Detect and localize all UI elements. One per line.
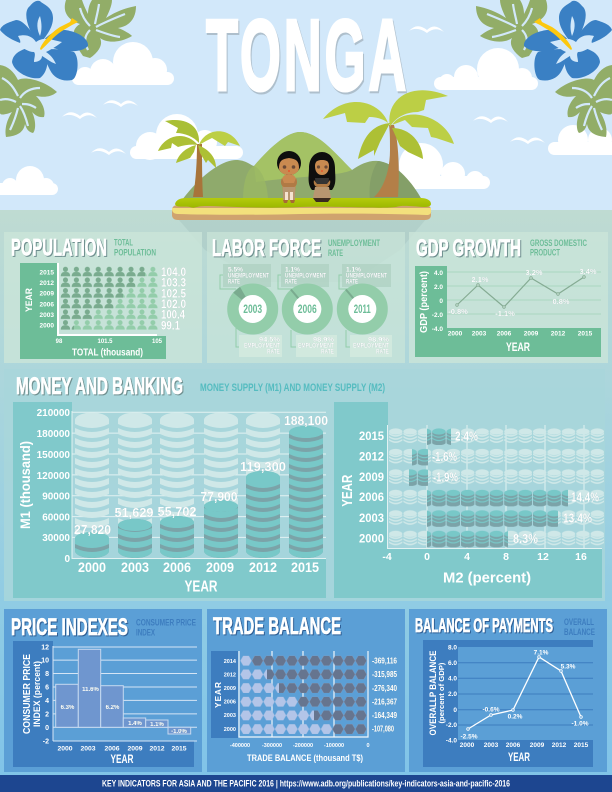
donut labels bbox=[228, 267, 389, 355]
line chart: overall balance: 2012 bbox=[552, 742, 567, 749]
bar chart: CPI: -1.0% bbox=[171, 729, 187, 735]
chart: population pictogram: 105 bbox=[152, 339, 163, 345]
bar chart: CPI: 8 bbox=[45, 671, 49, 678]
donut: 2003: 2003 bbox=[243, 304, 262, 316]
line chart: overall balance: -1.0% bbox=[572, 720, 589, 728]
row 2009 bbox=[388, 467, 604, 487]
donut labels: RATE bbox=[376, 348, 389, 355]
subtitle: unemployment rate: RATE bbox=[328, 248, 343, 259]
line chart: GDP: 2009 bbox=[524, 331, 539, 338]
chart: M2 coin rows: -4 bbox=[382, 551, 392, 563]
chart: M2 coin rows: 13.4% bbox=[563, 510, 592, 526]
stack 2012 bbox=[246, 412, 280, 558]
chart: M2 coin rows: M2 (percent) bbox=[443, 570, 531, 587]
chart: trade hexagons: 2014 bbox=[224, 659, 237, 665]
chart: M2 coin rows: 12 bbox=[537, 551, 549, 563]
chart: M1 coin stacks: 0 bbox=[64, 554, 70, 565]
grass bbox=[175, 198, 431, 208]
chart: M2 coin rows bbox=[334, 402, 604, 598]
bar chart: CPI: 10 bbox=[41, 658, 49, 664]
chart: trade hexagons: -276,340 bbox=[372, 684, 397, 693]
chart: population pictogram: 102.5 bbox=[161, 288, 187, 300]
subtitle: total population: POPULATION bbox=[114, 248, 156, 259]
chart: M1 coin stacks: 2003 bbox=[121, 560, 149, 575]
stack 2015 bbox=[289, 426, 323, 558]
boy character bbox=[277, 151, 301, 203]
subtitle: total population: TOTAL bbox=[114, 238, 133, 249]
line chart: GDP: 2.1% bbox=[471, 275, 489, 284]
chart: M1 coin stacks: 2009 bbox=[206, 560, 234, 575]
label boxes bbox=[220, 264, 392, 357]
line chart: overall balance bbox=[423, 640, 593, 767]
row 2006 bbox=[388, 487, 604, 508]
bar chart: CPI: 2003 bbox=[80, 746, 96, 753]
chart: trade hexagons: -300000 bbox=[262, 743, 282, 749]
right palm bbox=[323, 90, 454, 197]
line chart: overall balance: 4.0 bbox=[448, 676, 457, 682]
bar chart: CPI: 2012 bbox=[149, 746, 165, 753]
bar chart: CPI: 2015 bbox=[171, 746, 187, 753]
bar chart: CPI: 2 bbox=[45, 712, 49, 718]
line chart: overall balance: -0.6% bbox=[483, 706, 500, 714]
chart: M2 coin rows: 8.3% bbox=[513, 531, 538, 546]
donut labels: 1.1% bbox=[346, 267, 361, 274]
chart: trade hexagons: 2000 bbox=[224, 727, 236, 733]
chart: population pictogram: 100.4 bbox=[161, 310, 186, 322]
subtitle: unemployment rate: UNEMPLOYMENT bbox=[328, 238, 380, 249]
chart: population pictogram: 98 bbox=[56, 339, 63, 345]
chart: M1 coin stacks: 55,702 bbox=[158, 504, 196, 519]
chart: M2 coin rows: 2006 bbox=[359, 492, 384, 504]
stack 2006 bbox=[160, 412, 194, 558]
donut: 2011: 2011 bbox=[354, 304, 371, 316]
chart: M1 coin stacks: 2006 bbox=[163, 560, 191, 575]
donut labels: 5.5% bbox=[228, 267, 243, 274]
chart: M2 coin rows: YEAR bbox=[339, 475, 356, 507]
line chart: overall balance: 2000 bbox=[460, 742, 475, 749]
line chart: overall balance: 6.0 bbox=[448, 660, 457, 667]
subtitle: consumer price index: CONSUMER PRICE bbox=[136, 618, 196, 629]
chart: population pictogram: 2015 bbox=[40, 270, 54, 276]
line chart: GDP: -1.1% bbox=[495, 309, 515, 318]
chart: M1 coin stacks: YEAR bbox=[184, 579, 218, 596]
donut labels: UNEMPLOYMENT bbox=[228, 272, 269, 279]
donut labels: EMPLOYMENT bbox=[244, 343, 280, 350]
line chart: overall balance: 2006 bbox=[506, 742, 521, 749]
bar chart: CPI: 1.4% bbox=[128, 721, 142, 727]
chart: trade hexagons: -400000 bbox=[230, 743, 250, 749]
chart: trade hexagons: -100000 bbox=[324, 743, 344, 749]
line chart: GDP: -0.8% bbox=[448, 307, 468, 316]
chart: M1 coin stacks: 30000 bbox=[42, 533, 70, 544]
chart: M1 coin stacks: M1 (thousand) bbox=[17, 441, 33, 529]
sand bbox=[172, 205, 431, 220]
chart: M1 coin stacks: 90000 bbox=[42, 492, 70, 502]
chart: population pictogram: 2000 bbox=[40, 323, 54, 330]
chart: trade hexagons: 0 bbox=[366, 743, 370, 749]
island bbox=[172, 132, 431, 220]
chart: M1 coin stacks: 120000 bbox=[37, 471, 70, 482]
line chart: overall balance: 2009 bbox=[530, 742, 545, 749]
chart: trade hexagons: 2012 bbox=[224, 672, 236, 678]
bar chart: CPI: INDEX (percent) bbox=[32, 661, 42, 727]
chart: M2 coin rows: 8 bbox=[503, 551, 509, 563]
chart: M1 coin stacks: 51,629 bbox=[114, 505, 154, 520]
bar chart: CPI: 1.1% bbox=[150, 722, 164, 728]
background: sea bbox=[0, 210, 612, 792]
panel: trade balance bbox=[207, 609, 405, 772]
line chart: overall balance: 2.0 bbox=[448, 691, 457, 698]
subtitle: gross domestic product: PRODUCT bbox=[530, 248, 560, 259]
footer bar bbox=[0, 775, 612, 792]
panel: GDP growth bbox=[409, 232, 608, 363]
heading: money and banking: MONEY AND BANKING bbox=[16, 373, 183, 400]
line chart: overall balance: OVERALLP BALANCE bbox=[428, 650, 439, 736]
stack 2003 bbox=[118, 412, 152, 558]
chart: trade hexagons: -369,116 bbox=[372, 656, 397, 666]
chart: M1 coin stacks: 77,900 bbox=[200, 489, 238, 504]
hibiscus left bbox=[0, 0, 136, 137]
chart: M2 coin rows: 16 bbox=[575, 551, 587, 563]
line chart: GDP: 2.0 bbox=[434, 284, 443, 291]
chart: population pictogram bbox=[20, 263, 187, 359]
bar chart: CPI: 6.2% bbox=[106, 705, 120, 711]
chart: trade hexagons: 2003 bbox=[224, 713, 236, 719]
line chart: GDP: YEAR bbox=[506, 340, 530, 354]
line chart: overall balance: -2.0 bbox=[446, 722, 457, 729]
line chart: overall balance: YEAR bbox=[508, 750, 530, 764]
line chart: GDP: GDP (percent) bbox=[419, 271, 430, 333]
donut labels: RATE bbox=[346, 278, 358, 285]
chart: trade hexagons: -216,367 bbox=[372, 698, 397, 706]
chart: population pictogram: 101.5 bbox=[97, 339, 113, 345]
line chart: GDP: 4.0 bbox=[434, 270, 443, 277]
bar chart: CPI: CONSUMER PRICE bbox=[22, 654, 33, 734]
line chart: overall balance: -4.0 bbox=[446, 738, 457, 744]
donut: 2006 bbox=[288, 289, 327, 329]
chart: M2 coin rows: 2015 bbox=[359, 431, 385, 443]
island reflection bbox=[172, 212, 432, 282]
hibiscus right bbox=[476, 0, 612, 137]
chart: population pictogram: 2006 bbox=[40, 301, 54, 308]
heading: price indexes: PRICE INDEXES bbox=[11, 614, 128, 641]
line chart: GDP: 2000 bbox=[448, 331, 463, 338]
donut labels: 98.9% bbox=[313, 337, 334, 344]
line chart: GDP: -4.0 bbox=[432, 326, 443, 333]
chart: M1 coin stacks: 119,300 bbox=[240, 459, 286, 474]
chart: M1 coin stacks bbox=[13, 402, 328, 598]
clouds bbox=[0, 42, 612, 195]
line chart: overall balance: 2003 bbox=[484, 742, 499, 749]
bar chart: CPI: -2 bbox=[43, 738, 49, 746]
chart: trade hexagons: 2009 bbox=[224, 686, 236, 692]
girl character bbox=[309, 152, 335, 202]
subtitle: total population bbox=[114, 238, 156, 259]
bar chart: CPI: 4 bbox=[45, 698, 49, 705]
chart: M1 coin stacks: 2000 bbox=[78, 560, 106, 575]
chart: population pictogram: 2009 bbox=[40, 291, 54, 298]
panel: money and banking bbox=[4, 369, 605, 601]
line chart: GDP: 3.2% bbox=[525, 268, 543, 277]
donut labels: EMPLOYMENT bbox=[353, 343, 389, 350]
row 2003 bbox=[388, 508, 604, 528]
heading: trade balance: TRADE BALANCE bbox=[213, 613, 341, 640]
donut labels: UNEMPLOYMENT bbox=[285, 272, 326, 279]
line chart: GDP: 3.4% bbox=[579, 267, 597, 276]
bar chart: CPI: 6.3% bbox=[61, 705, 75, 711]
panel: balance of payments bbox=[409, 609, 607, 772]
line chart: GDP: 2015 bbox=[578, 331, 593, 338]
left palm bbox=[158, 120, 240, 197]
line chart: overall balance: (percent of GDP) bbox=[439, 662, 446, 724]
bar chart: CPI: 0 bbox=[45, 725, 49, 732]
bar chart: CPI: YEAR bbox=[110, 752, 134, 766]
chart: M2 coin rows: 2012 bbox=[359, 452, 384, 464]
chart: M2 coin rows: 14.4% bbox=[571, 490, 599, 504]
chart: M2 coin rows: -1.6% bbox=[432, 449, 457, 464]
panel: price indexes bbox=[4, 609, 202, 772]
line chart: GDP: 0 bbox=[439, 298, 443, 305]
chart: population pictogram: 2003 bbox=[40, 312, 54, 319]
line chart: GDP: 2003 bbox=[472, 331, 487, 338]
chart: trade hexagons: -200000 bbox=[293, 743, 313, 749]
line chart: overall balance: 8.0 bbox=[448, 644, 457, 652]
chart: population pictogram: 103.3 bbox=[161, 278, 186, 290]
donut: 2006: 2006 bbox=[298, 304, 317, 316]
chart: M1 coin stacks: 210000 bbox=[37, 408, 70, 419]
heading: GDP growth: GDP GROWTH bbox=[416, 235, 521, 262]
chart: population pictogram: 99.1 bbox=[161, 320, 181, 332]
subtitle: gross domestic product bbox=[530, 238, 587, 259]
donut labels: 98.9% bbox=[368, 337, 389, 344]
line chart: GDP: 0.8% bbox=[552, 297, 570, 306]
donut labels: 1.1% bbox=[285, 267, 300, 274]
donut labels: RATE bbox=[228, 278, 240, 285]
bar chart: CPI: 2000 bbox=[57, 746, 73, 753]
chart: trade hexagons: TRADE BALANCE (thousand T$) bbox=[247, 753, 363, 763]
bar chart: CPI bbox=[13, 641, 197, 767]
hills bbox=[182, 132, 422, 200]
subtitle: consumer price index: INDEX bbox=[136, 628, 155, 639]
line chart: overall balance: 5.3% bbox=[561, 664, 576, 670]
chart: M2 coin rows: 4 bbox=[464, 551, 470, 563]
chart: M1 coin stacks: 188,100 bbox=[284, 413, 328, 428]
chart: M2 coin rows: 2000 bbox=[359, 534, 384, 546]
donut labels: RATE bbox=[285, 278, 297, 285]
subtitle: overall balance bbox=[564, 617, 595, 638]
donut labels: RATE bbox=[267, 348, 280, 355]
chart: M2 coin rows: 0 bbox=[424, 551, 430, 563]
chart: M2 coin rows: 2.4% bbox=[455, 428, 478, 444]
bar chart: CPI: 11.6% bbox=[82, 687, 100, 693]
row 2015 bbox=[388, 426, 604, 446]
chart: trade hexagons: 2006 bbox=[224, 700, 236, 706]
donut labels: RATE bbox=[321, 348, 334, 355]
chart: M1 coin stacks: 2012 bbox=[249, 560, 277, 575]
bar chart: CPI: 6 bbox=[45, 684, 49, 692]
chart: population pictogram: YEAR bbox=[24, 288, 35, 312]
donut: 2011 bbox=[343, 289, 382, 329]
line chart: overall balance: 7.1% bbox=[534, 650, 549, 656]
chart: M1 coin stacks: 60000 bbox=[42, 512, 70, 524]
heading: population: POPULATION bbox=[11, 234, 107, 262]
chart: trade hexagons: -107,080 bbox=[372, 724, 394, 734]
heading: labor force: LABOR FORCE bbox=[212, 235, 321, 262]
donut labels: UNEMPLOYMENT bbox=[346, 272, 387, 279]
chart: M1 coin stacks: 150000 bbox=[37, 450, 70, 461]
line chart: overall balance: 2015 bbox=[574, 742, 589, 749]
line chart: GDP bbox=[415, 266, 601, 357]
birds bbox=[62, 26, 545, 155]
line chart: overall balance: 0 bbox=[453, 707, 457, 714]
bar chart: CPI: 2009 bbox=[127, 746, 143, 753]
chart: population pictogram: 104.0 bbox=[161, 267, 186, 279]
stack 2009 bbox=[204, 412, 238, 558]
bar chart: CPI: 2006 bbox=[104, 746, 120, 753]
chart: trade hexagons: -164,349 bbox=[372, 711, 397, 720]
chart: trade hexagons: YEAR bbox=[213, 682, 223, 708]
chart: population pictogram: TOTAL (thousand) bbox=[72, 348, 143, 359]
line chart: overall balance: 0.2% bbox=[508, 714, 523, 720]
chart: trade hexagons bbox=[211, 651, 397, 763]
subtitle: money supply: MONEY SUPPLY (M1) AND MONEY SUPPLY (M2) bbox=[200, 382, 385, 394]
chart: trade hexagons: -315,985 bbox=[372, 670, 397, 679]
donut labels: 94.5% bbox=[259, 337, 280, 344]
chart: population pictogram: 102.0 bbox=[161, 299, 186, 311]
line chart: GDP: 2012 bbox=[551, 331, 566, 338]
chart: M2 coin rows: 2003 bbox=[359, 513, 384, 525]
chart: M1 coin stacks: 2015 bbox=[291, 560, 319, 575]
line chart: overall balance: -2.5% bbox=[461, 734, 478, 740]
background: sky bbox=[0, 0, 612, 212]
title: TONGA bbox=[206, 0, 409, 113]
panel: labor force bbox=[207, 232, 405, 363]
subtitle: overall balance: BALANCE bbox=[564, 627, 595, 638]
line chart: GDP: 2006 bbox=[497, 331, 512, 338]
donut: 2003 bbox=[233, 287, 272, 329]
subtitle: unemployment rate bbox=[328, 238, 380, 259]
chart: M1 coin stacks: 180000 bbox=[37, 429, 70, 440]
donut labels: EMPLOYMENT bbox=[298, 343, 334, 350]
line chart: GDP: -2.0 bbox=[432, 312, 443, 319]
chart: population pictogram: 2012 bbox=[40, 280, 54, 287]
chart: M1 coin stacks: 27,820 bbox=[74, 522, 111, 537]
subtitle: consumer price index bbox=[136, 618, 196, 639]
chart: M2 coin rows: 2009 bbox=[359, 472, 384, 484]
row 2012 bbox=[388, 446, 604, 467]
panel: population bbox=[4, 232, 202, 363]
bar chart: CPI: 12 bbox=[41, 644, 49, 652]
subtitle: overall balance: OVERALL bbox=[564, 617, 594, 628]
stack 2000 bbox=[75, 412, 109, 558]
chart: M2 coin rows: -1.9% bbox=[433, 470, 458, 484]
row 2000 bbox=[388, 528, 604, 549]
